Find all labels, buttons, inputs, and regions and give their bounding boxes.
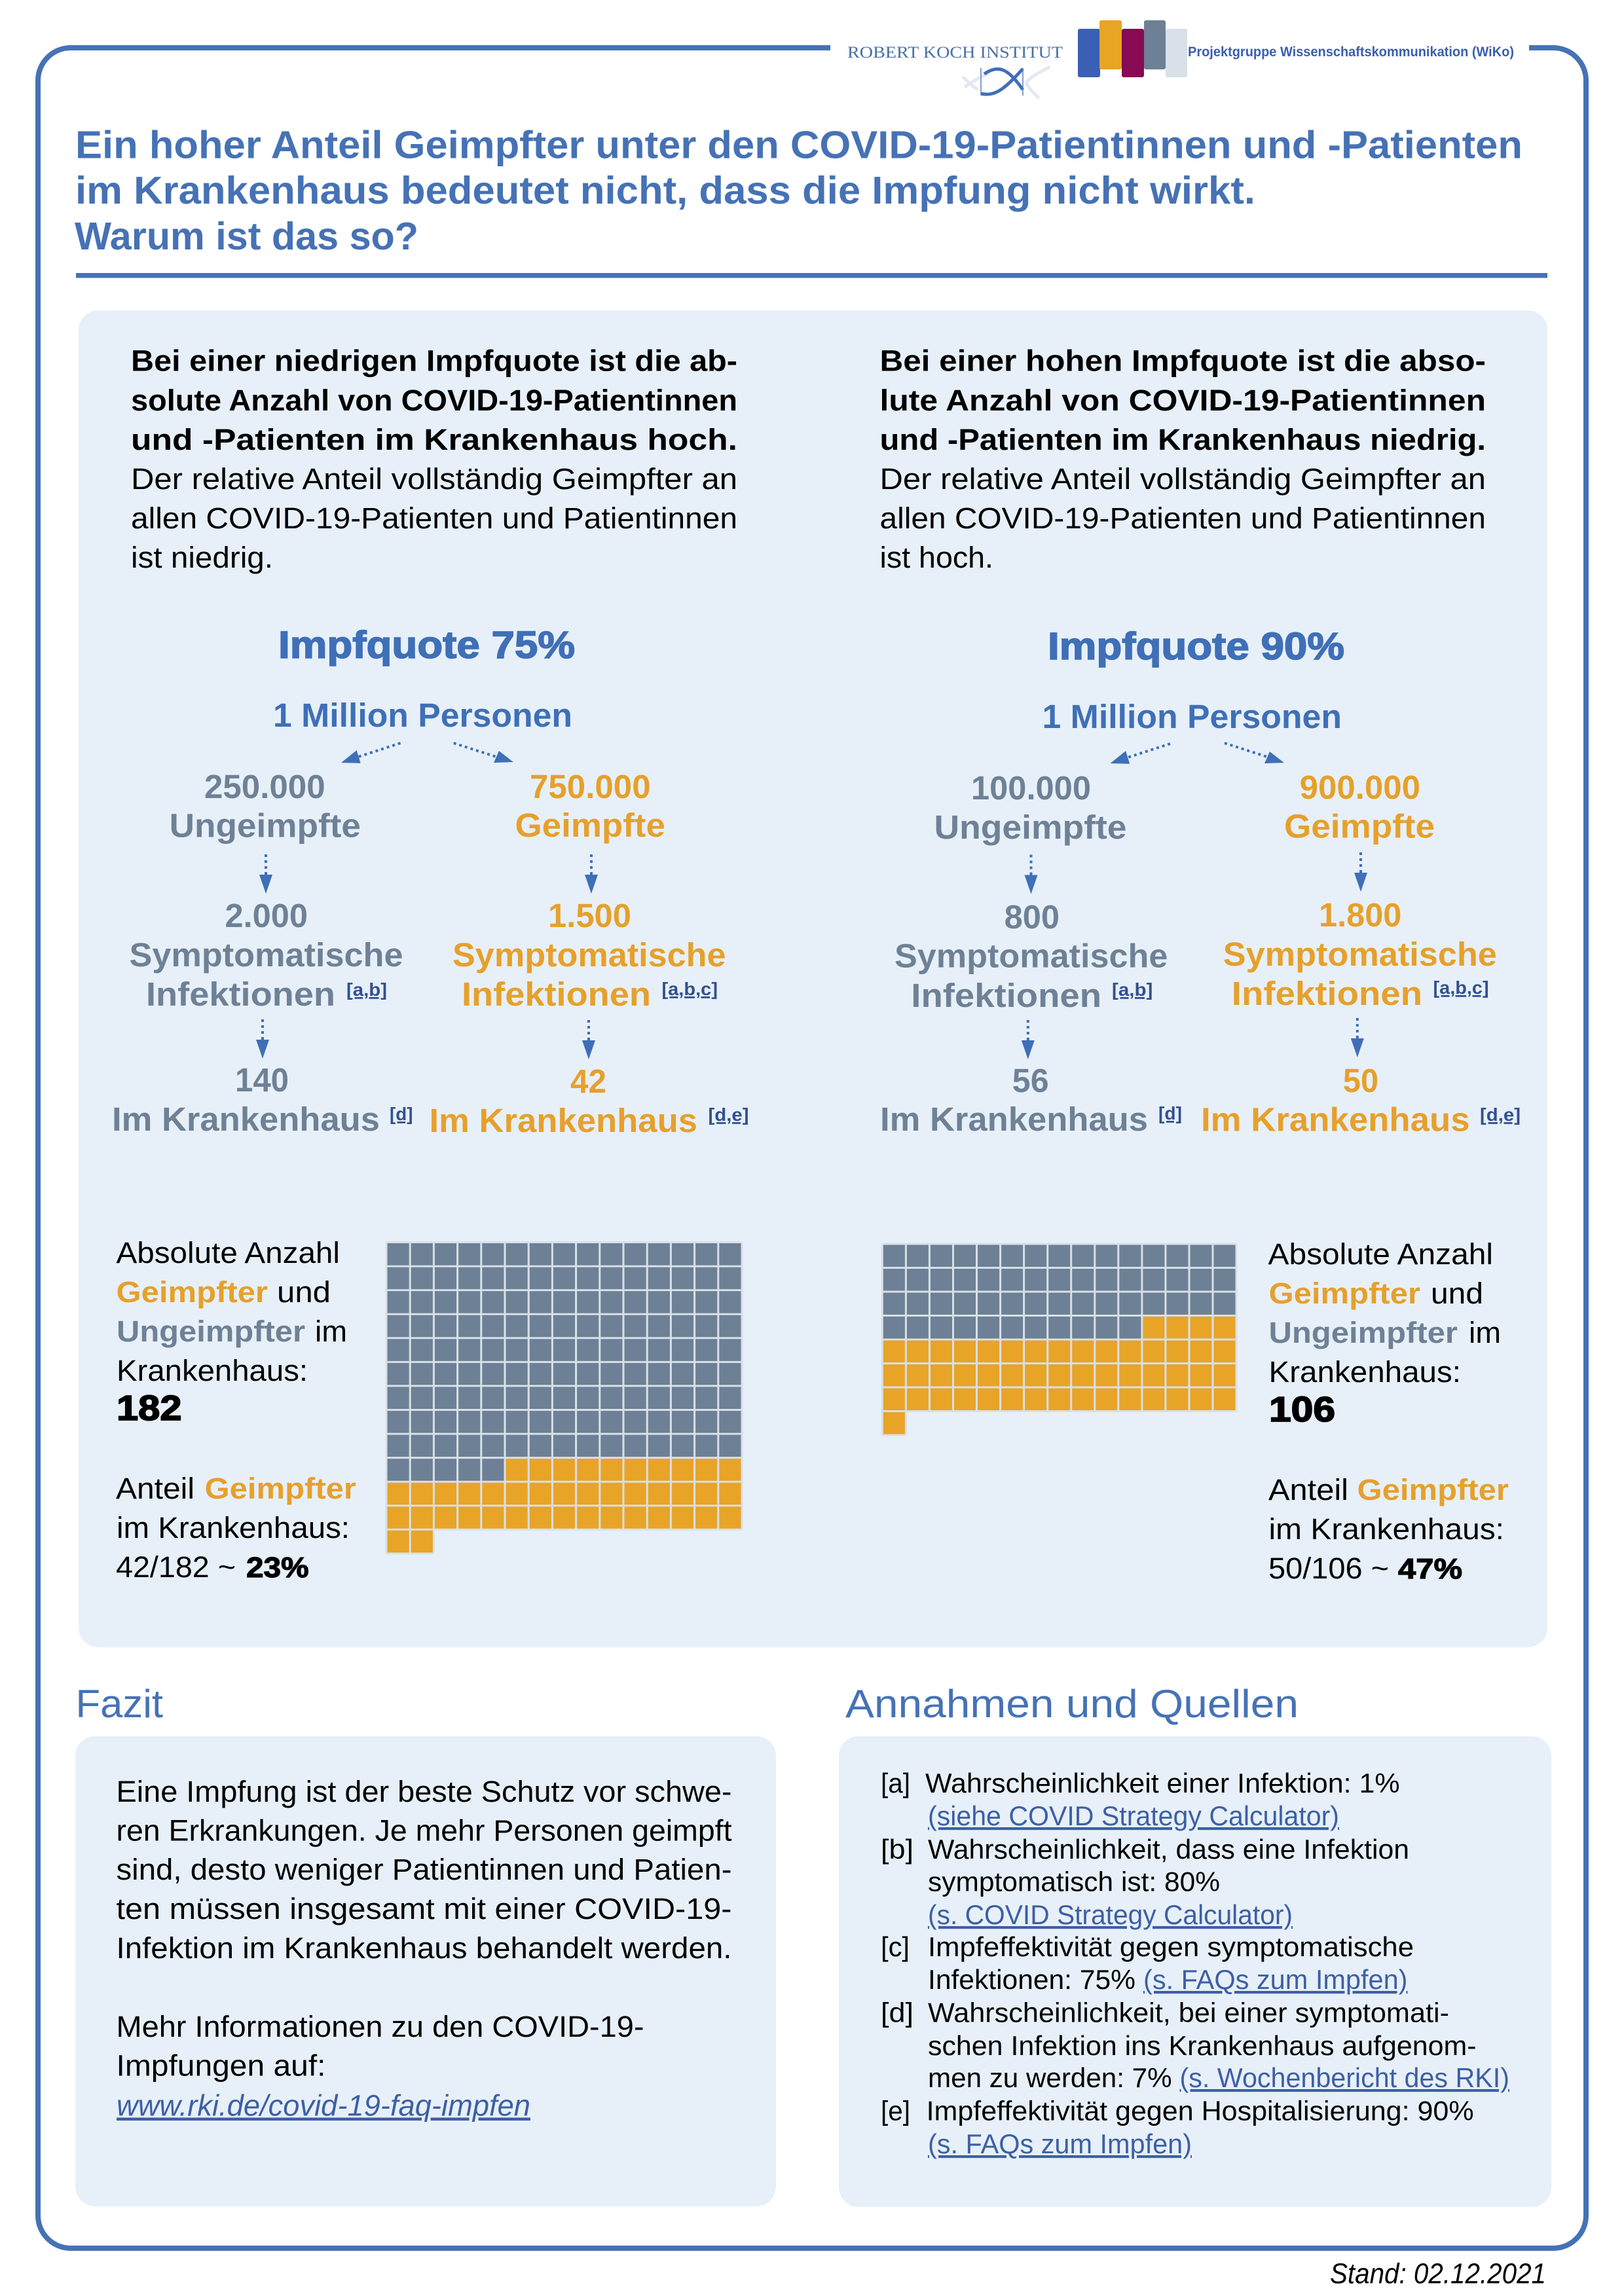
panel: Annahmen und Quellen [839,1736,1551,2207]
flow diagram: 90% [880,698,1521,1138]
unvaccinated in hospital: [d] [390,1104,413,1124]
vaccinated infections: [a,b,c] [661,979,718,999]
source b: (s. COVID Strategy Calculator) [928,1899,1293,1930]
text block: summary 75%: Krankenhaus: [117,1354,308,1387]
unvaccinated infections: 2.000 [225,897,308,934]
vaccinated in hospital [430,1063,749,1139]
arrow: vaccinated to infections [1354,852,1367,892]
unvaccinated in hospital: [d] [1158,1103,1182,1123]
unvaccinated infections [895,898,1168,1014]
vaccinated infections: [a,b,c] [1433,977,1489,998]
panel: comparison background [79,310,1547,1647]
source e [881,2095,1474,2159]
source d: Wahrscheinlichkeit, bei einer symptomati- [928,1997,1449,2028]
source e: (s. FAQs zum Impfen) [928,2128,1192,2159]
source c: [c] [881,1931,910,1962]
vaccinated count [1284,769,1435,845]
vaccinated in hospital: 42 [570,1063,606,1100]
text block: summary 75%: Absolute Anzahl [117,1236,340,1269]
source d: [d] [881,1997,913,2028]
arrow: vaccinated to hospital [1351,1018,1364,1057]
waffle chart: 75% [386,1243,742,1554]
vaccinated in hospital: Im Krankenhaus [430,1102,697,1139]
source b [881,1834,1409,1930]
source d: men zu werden: 7% [928,2062,1172,2093]
text block: low vaccination rate: und -Patienten im Krankenhaus hoch. [131,423,737,456]
text block: summary 75%: Anteil [116,1472,194,1505]
text block: high vaccination rate: allen COVID-19-Patienten und Patientinnen [880,501,1486,535]
more information text [117,2010,644,2123]
text block: summary 75%: Geimpfter [204,1472,356,1505]
arrow: unvaccinated to hospital [256,1019,269,1059]
source c: Infektionen: 75% [928,1964,1135,1995]
source e: [e] [881,2095,910,2126]
text block: low vaccination rate: ist niedrig. [131,541,273,574]
title [75,123,1522,258]
unvaccinated infections: Infektionen [146,975,335,1013]
text block: high vaccination rate: Bei einer hohen Impfquote ist die abso- [880,344,1486,377]
unvaccinated infections: 800 [1005,898,1060,936]
conclusion text [117,1775,732,1965]
source a: (siehe COVID Strategy Calculator) [928,1800,1339,1831]
text block: summary 90%: Anteil [1268,1473,1348,1506]
text block: summary 75%: im [315,1315,347,1348]
text block: low vaccination rate [131,344,737,574]
heading: Impfquote 90%: Impfquote 90% [1048,625,1344,668]
source e: Impfeffektivität gegen Hospitalisierung: 90% [927,2095,1474,2126]
conclusion text: Infektion im Krankenhaus behandelt werden. [117,1931,732,1965]
arrow: vaccinated to hospital [582,1020,595,1059]
vaccinated in hospital: [d,e] [1480,1104,1521,1125]
text block: summary 75%: 23% [246,1552,309,1584]
vaccinated count: 900.000 [1300,769,1420,806]
text block: summary 75%: Ungeimpfter [117,1315,305,1348]
text block: summary 75%: Geimpfter [117,1275,268,1309]
unvaccinated count: 100.000 [971,769,1091,807]
more information text: Impfungen auf: [117,2049,326,2082]
vaccinated in hospital: 50 [1343,1062,1378,1099]
root label: 1 Million Personen [1043,698,1342,735]
arrow: unvaccinated to infections [259,854,272,894]
source d [881,1997,1509,2093]
text block: summary 90%: Geimpfter [1269,1277,1420,1310]
date stamp: Stand: 02.12.2021 [1330,2257,1546,2290]
text block: summary 90% [1268,1237,1509,1585]
source a: [a] [881,1768,910,1798]
arrow: to unvaccinated [341,743,401,763]
text block: summary 90%: 47% [1398,1553,1462,1585]
vaccinated count [515,768,665,844]
text block: summary 90%: 50/106 ~ [1268,1552,1389,1585]
arrow: to vaccinated [454,743,513,763]
vaccinated in hospital [1201,1062,1521,1138]
vaccinated infections [452,897,726,1013]
text block: summary 75%: 182 [117,1389,182,1428]
text block: summary 75%: und [277,1275,331,1309]
arrow: to unvaccinated [1111,744,1170,764]
text block: summary 90%: im Krankenhaus: [1269,1512,1504,1546]
vaccinated count: Geimpfte [1284,808,1435,845]
title: Warum ist das so? [75,215,418,258]
vaccinated count: 750.000 [530,768,651,805]
more information text: Mehr Informationen zu den COVID-19- [117,2010,644,2043]
text block: high vaccination rate: Der relative Anteil vollständig Geimpfter an [880,462,1486,496]
text block: low vaccination rate: Bei einer niedrigen Impfquote ist die ab- [131,344,737,377]
source b: [b] [881,1834,913,1865]
unvaccinated count [170,768,361,845]
heading: Fazit: Fazit [76,1682,163,1726]
vaccinated in hospital: Im Krankenhaus [1201,1101,1470,1138]
source a: Wahrscheinlichkeit einer Infektion: 1% [925,1768,1400,1798]
unvaccinated infections: Symptomatische [130,936,403,974]
text block: summary 90%: Krankenhaus: [1269,1355,1461,1389]
vaccinated infections: Infektionen [462,975,651,1013]
unvaccinated infections: [a,b] [1112,979,1153,1000]
unvaccinated in hospital: 140 [235,1061,289,1099]
vaccinated infections: 1.800 [1319,896,1401,934]
source d: (s. Wochenbericht des RKI) [1180,2062,1509,2093]
vaccinated infections: Infektionen [1232,975,1422,1012]
text block: high vaccination rate: und -Patienten im Krankenhaus niedrig. [880,423,1486,456]
unvaccinated count: Ungeimpfte [170,807,361,845]
logo: Robert Koch Institut [847,44,1063,98]
vaccinated infections: Symptomatische [1223,936,1497,973]
conclusion text: ren Erkrankungen. Je mehr Personen geimpft [117,1814,732,1848]
more information text: www.rki.de/covid-19-faq-impfen [117,2088,530,2123]
title rule [76,273,1547,278]
unvaccinated infections [130,897,403,1013]
text block: high vaccination rate: ist hoch. [880,541,993,574]
heading: Impfquote 75%: Impfquote 75% [278,624,575,666]
arrow: unvaccinated to infections [1024,855,1037,894]
text block: summary 90%: Geimpfter [1357,1473,1509,1506]
vaccinated in hospital: [d,e] [709,1104,749,1125]
unvaccinated infections: Symptomatische [895,938,1168,975]
arrow: vaccinated to infections [585,854,598,894]
text block: summary 90%: und [1431,1277,1483,1310]
source b: symptomatisch ist: 80% [928,1866,1220,1897]
logo: Robert Koch Institut: ROBERT KOCH INSTITUT [847,44,1063,62]
unvaccinated count: Ungeimpfte [934,809,1126,846]
source d: schen Infektion ins Krankenhaus aufgenom- [928,2030,1477,2061]
unvaccinated in hospital: 56 [1012,1062,1049,1099]
flow diagram: 75% [112,697,749,1139]
waffle chart: 90% [882,1244,1236,1435]
title: Ein hoher Anteil Geimpfter unter den COVID-19-Patientinnen und -Patienten [75,123,1522,166]
panel: Fazit [75,1736,776,2206]
arrow: unvaccinated to hospital [1022,1020,1035,1059]
source b: Wahrscheinlichkeit, dass eine Infektion [928,1834,1409,1865]
unvaccinated infections: Infektionen [911,977,1101,1014]
text block: summary 75%: 42/182 ~ [116,1550,236,1584]
text block: low vaccination rate: solute Anzahl von COVID-19-Patientinnen [131,384,737,417]
text block: summary 75%: im Krankenhaus: [117,1511,350,1544]
logo: WiKo colour blocks [1078,20,1187,77]
unvaccinated in hospital [112,1061,413,1138]
text block: summary 90%: Absolute Anzahl [1268,1237,1493,1271]
title: im Krankenhaus bedeutet nicht, dass die Impfung nicht wirkt. [75,169,1255,212]
text block: high vaccination rate: lute Anzahl von COVID-19-Patientinnen [880,384,1486,417]
vaccinated count: Geimpfte [515,807,665,844]
text block: summary 90%: 106 [1269,1390,1335,1429]
text block: low vaccination rate: allen COVID-19-Patienten und Patientinnen [131,501,737,535]
source c [881,1931,1414,1995]
unvaccinated infections: [a,b] [346,979,387,1000]
unvaccinated in hospital: Im Krankenhaus [880,1101,1148,1138]
source c: Impfeffektivität gegen symptomatische [928,1931,1414,1962]
heading: Annahmen und Quellen: Annahmen und Quellen [845,1682,1299,1726]
text block: summary 75% [116,1236,356,1584]
source c: (s. FAQs zum Impfen) [1143,1964,1408,1995]
conclusion text: Eine Impfung ist der beste Schutz vor schwe- [117,1775,732,1808]
root label: 1 Million Personen [273,697,572,734]
source a [881,1768,1400,1831]
conclusion text: sind, desto weniger Patientinnen und Patien- [117,1853,732,1886]
unvaccinated in hospital [880,1062,1182,1138]
text block: high vaccination rate [880,344,1486,574]
text block: summary 90%: Ungeimpfter [1269,1316,1458,1349]
logo text: Projektgruppe WiKo: Projektgruppe Wissenschaftskommunikation (WiKo) [1188,45,1514,60]
vaccinated infections: Symptomatische [452,936,726,974]
arrow: to vaccinated [1225,743,1284,763]
vaccinated infections: 1.500 [548,897,631,934]
unvaccinated in hospital: Im Krankenhaus [112,1101,380,1138]
unvaccinated count: 250.000 [204,768,325,805]
vaccinated infections [1223,896,1497,1012]
text block: low vaccination rate: Der relative Anteil vollständig Geimpfter an [131,462,737,496]
unvaccinated count [934,769,1126,846]
text block: summary 90%: im [1469,1316,1501,1349]
conclusion text: ten müssen insgesamt mit einer COVID-19- [117,1892,732,1925]
